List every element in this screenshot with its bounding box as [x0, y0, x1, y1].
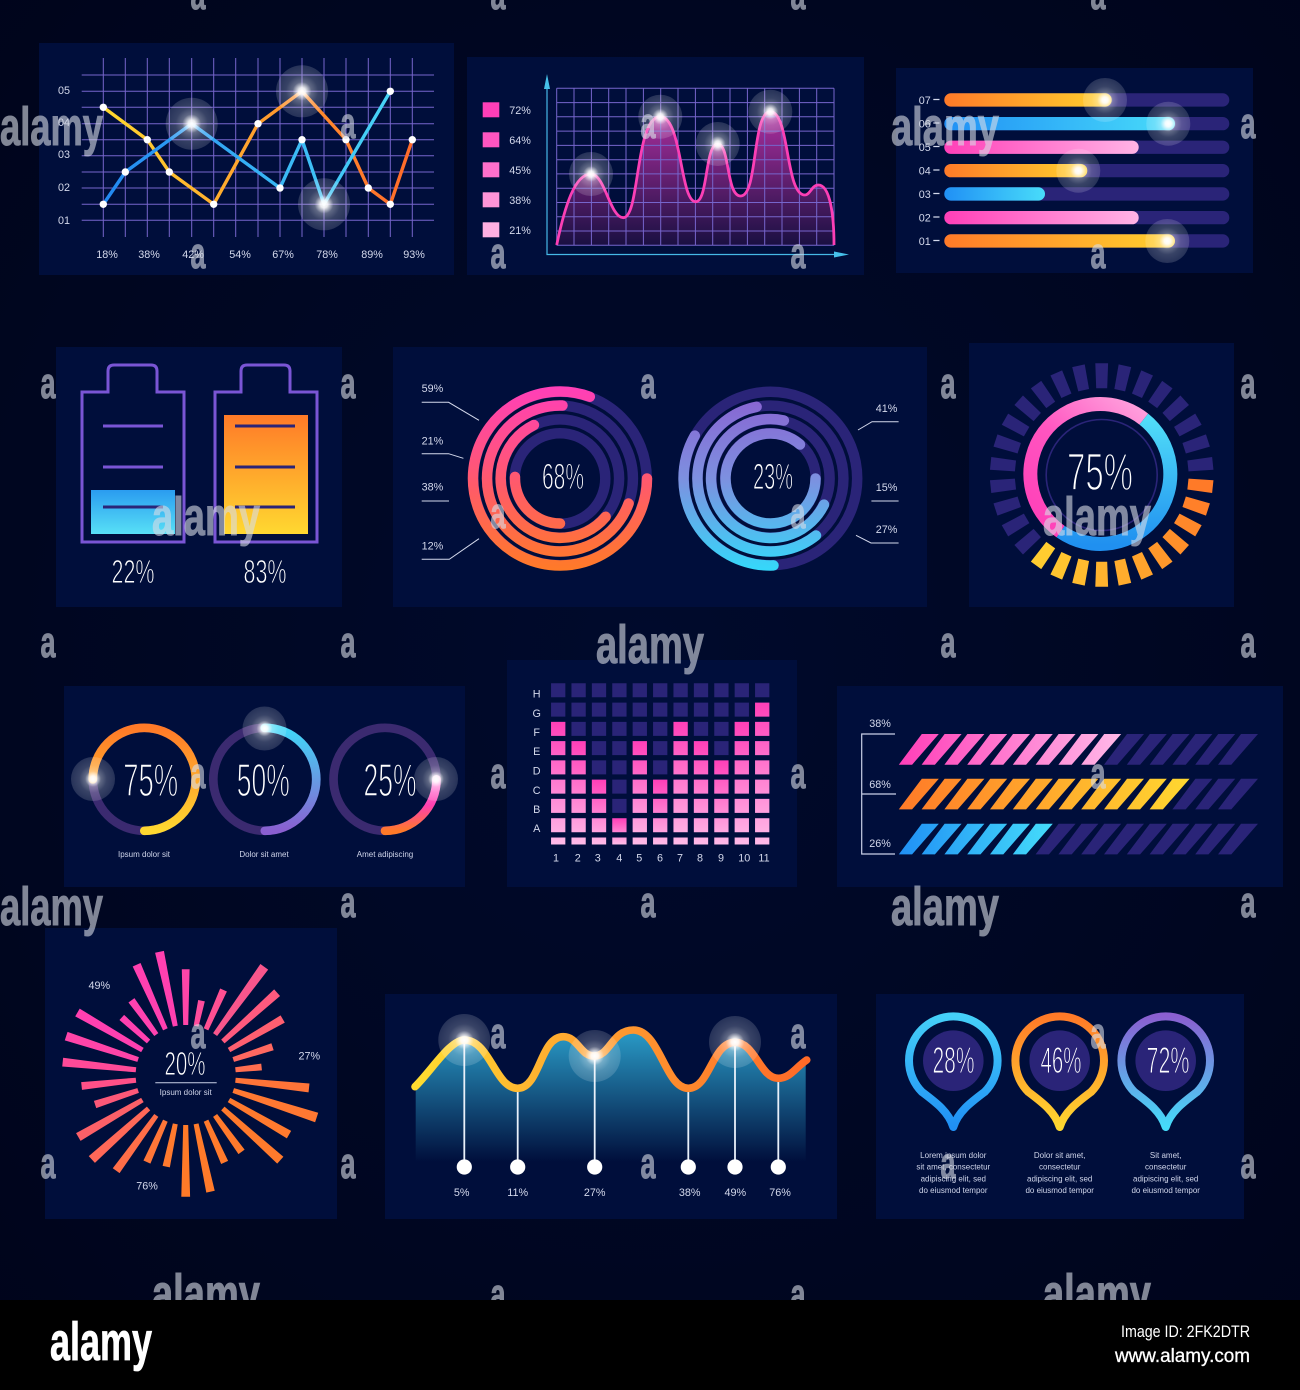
watermark overlay: a — [790, 749, 806, 798]
x axis labels — [96, 249, 425, 261]
legend: 72% — [509, 105, 531, 117]
burst rays — [62, 951, 318, 1197]
row labels: F — [533, 727, 540, 739]
leader labels left: 59% — [422, 383, 444, 395]
burst labels: 49% — [88, 980, 110, 992]
watermark overlay: a — [190, 1009, 206, 1058]
wave labels: 27% — [584, 1187, 606, 1199]
watermark overlay: a — [340, 1139, 356, 1188]
panel: concentric ring gauges — [393, 347, 927, 607]
bar labels: 04 — [919, 166, 931, 178]
footer bar: alamy — [50, 1312, 152, 1372]
footer bar: www.alamy.com — [1114, 1346, 1250, 1367]
pin 28%: 28% — [932, 1040, 974, 1081]
wave labels: 11% — [507, 1187, 529, 1199]
legend — [483, 102, 531, 237]
footer bar — [0, 1300, 1300, 1390]
watermark overlay: a — [940, 618, 956, 667]
stripes 38% pink — [899, 734, 1121, 765]
pin 28%: Lorem ipsum dolor — [920, 1151, 987, 1160]
watermark overlay: alamy — [891, 877, 999, 937]
ring gauge 68%: 68% — [542, 456, 584, 497]
watermark overlay: a — [940, 1139, 956, 1188]
gauge 75% — [71, 728, 196, 859]
axes with arrows — [544, 74, 849, 258]
row labels: E — [533, 746, 540, 758]
glow highlights — [569, 90, 792, 196]
bar labels: 03 — [919, 189, 931, 201]
y axis labels: 02 — [58, 182, 70, 194]
stripes 68% orange — [899, 779, 1190, 809]
watermark overlay: a — [640, 1139, 656, 1188]
gauge 75%: 75% — [123, 754, 178, 806]
x axis labels: 78% — [316, 249, 338, 261]
watermark overlay: alamy — [1043, 487, 1151, 547]
leader labels right: 41% — [876, 403, 898, 415]
panel: two-series line chart — [39, 43, 454, 275]
legend: 38% — [509, 195, 531, 207]
y axis labels — [58, 85, 70, 227]
pin 28%: adipiscing elit, sed — [921, 1174, 986, 1183]
column labels: 9 — [718, 852, 724, 864]
area curve — [557, 112, 834, 245]
watermark overlay: a — [190, 229, 206, 278]
pin 46%: do eiusmod tempor — [1025, 1186, 1094, 1195]
watermark overlay: a — [1240, 878, 1256, 927]
y axis labels: 01 — [58, 215, 70, 227]
column labels — [553, 852, 770, 864]
watermark overlay: a — [340, 878, 356, 927]
leader labels left: 38% — [422, 482, 444, 494]
panel: three circular progress gauges — [64, 686, 465, 887]
watermark overlay: a — [790, 229, 806, 278]
gauge 50%: 50% — [237, 754, 290, 806]
column labels: 4 — [616, 852, 622, 864]
watermark overlay: a — [1240, 359, 1256, 408]
panel: radial tick gauge — [969, 343, 1234, 607]
column labels: 7 — [677, 852, 683, 864]
battery 22%: 22% — [112, 553, 154, 590]
matrix columns — [558, 683, 762, 844]
watermark overlay: a — [40, 359, 56, 408]
row labels: A — [533, 823, 541, 835]
panel: radial burst chart — [45, 928, 337, 1219]
area fill — [557, 112, 834, 245]
pin 72%: Sit amet, — [1150, 1151, 1181, 1160]
watermark overlay: a — [490, 489, 506, 538]
stripe tracks — [1036, 734, 1258, 854]
watermark overlay: alamy — [152, 1264, 260, 1324]
column labels: 3 — [595, 852, 601, 864]
ring gauge 23%: 23% — [753, 456, 793, 497]
watermark overlay: a — [490, 1009, 506, 1058]
watermark overlay: a — [790, 489, 806, 538]
watermark overlay: alamy — [0, 97, 103, 157]
battery 83%: 83% — [244, 553, 286, 590]
column labels: 8 — [697, 852, 703, 864]
gauge 25%: Amet adipiscing — [357, 850, 413, 859]
gauge 25%: 25% — [364, 754, 416, 806]
pin 28%: sit amet, consectetur — [916, 1163, 991, 1172]
burst centre value: 20% — [164, 1045, 206, 1082]
row labels: D — [533, 765, 541, 777]
panel: map pin gauges — [876, 994, 1244, 1219]
watermark overlay: a — [640, 878, 656, 927]
burst labels — [88, 980, 320, 1192]
y axis labels: 05 — [58, 85, 70, 97]
line series: blue — [103, 91, 390, 204]
pin 72%: adipiscing elit, sed — [1133, 1174, 1198, 1183]
bar labels: 01 — [919, 236, 931, 248]
watermark overlay: a — [1240, 1139, 1256, 1188]
gauge 75%: Ipsum dolor sit — [118, 850, 171, 859]
gauge ring — [1030, 404, 1170, 544]
pin 28%: do eiusmod tempor — [919, 1186, 988, 1195]
pin 72%: consectetur — [1145, 1163, 1187, 1172]
wave labels: 38% — [679, 1187, 701, 1199]
gauge 50% — [213, 706, 316, 859]
pin 46%: adipiscing elit, sed — [1027, 1174, 1092, 1183]
bracket and labels: 38% — [869, 718, 891, 730]
bar labels — [919, 95, 940, 248]
watermark overlay: a — [490, 749, 506, 798]
column labels: 6 — [657, 852, 663, 864]
bar labels: 05 — [919, 142, 931, 154]
leader labels left: 21% — [422, 436, 444, 448]
panel: matrix heat map — [507, 660, 797, 887]
watermark overlay: alamy — [596, 615, 704, 675]
watermark overlay: a — [340, 618, 356, 667]
watermark overlay: a — [1240, 99, 1256, 148]
ring gauge 68% — [473, 391, 647, 565]
row labels: G — [532, 708, 541, 720]
watermark overlay: alamy — [1043, 1264, 1151, 1324]
x axis labels: 89% — [361, 249, 383, 261]
panel: striped progress bars — [837, 686, 1283, 887]
line series: yellow to orange — [103, 91, 412, 204]
row labels — [532, 688, 541, 835]
watermark overlay: a — [1090, 749, 1106, 798]
watermark overlay: a — [490, 1270, 506, 1319]
bar labels: 07 — [919, 95, 931, 107]
wave labels: 49% — [724, 1187, 746, 1199]
gauge 25% — [334, 728, 458, 859]
pin 28% — [909, 1016, 998, 1195]
leader labels left — [422, 383, 479, 559]
x axis labels: 93% — [403, 249, 425, 261]
watermark overlay: a — [490, 229, 506, 278]
gauge 50%: Dolor sit amet — [239, 850, 289, 859]
wave labels — [454, 1187, 791, 1199]
column labels: 11 — [758, 852, 770, 864]
leader labels right: 27% — [876, 524, 898, 536]
watermark overlay: a — [340, 359, 356, 408]
bracket and labels — [862, 718, 896, 854]
radial ticks — [990, 363, 1213, 587]
pin 46% — [1015, 1016, 1104, 1195]
legend: 45% — [509, 165, 531, 177]
stripes 26% blue — [899, 824, 1053, 854]
legend: 64% — [509, 135, 531, 147]
leader labels left: 12% — [422, 540, 444, 552]
pin 72% — [1121, 1016, 1210, 1195]
bracket and labels: 26% — [869, 838, 891, 850]
leader labels right — [856, 403, 899, 543]
watermark overlay: a — [790, 1009, 806, 1058]
burst centre value — [155, 1045, 217, 1097]
x axis labels: 54% — [229, 249, 251, 261]
y axis labels: 04 — [58, 117, 70, 129]
row labels: C — [533, 785, 541, 797]
pin 46%: 46% — [1040, 1040, 1082, 1081]
watermark overlay: a — [40, 618, 56, 667]
watermark overlay: a — [940, 359, 956, 408]
pin 72%: 72% — [1146, 1040, 1190, 1081]
data markers — [100, 88, 416, 208]
watermark overlay: a — [1090, 229, 1106, 278]
watermark overlay: a — [790, 1270, 806, 1319]
column labels: 10 — [738, 852, 750, 864]
battery 22% — [82, 365, 184, 590]
pin 72%: do eiusmod tempor — [1131, 1186, 1200, 1195]
watermark overlay: alamy — [891, 97, 999, 157]
watermark overlay: a — [340, 99, 356, 148]
panel: horizontal progress bars — [896, 68, 1253, 273]
footer bar: Image ID: 2FK2DTR — [1121, 1322, 1250, 1341]
panel: pink area chart — [467, 57, 864, 275]
row labels: H — [533, 688, 541, 700]
x axis labels: 18% — [96, 249, 118, 261]
watermark overlay: a — [40, 1139, 56, 1188]
pin 46%: Dolor sit amet, — [1034, 1151, 1085, 1160]
watermark overlay: a — [640, 359, 656, 408]
row labels: B — [533, 804, 540, 816]
x axis labels: 38% — [138, 249, 160, 261]
column labels: 2 — [575, 852, 581, 864]
pin stems and dots — [457, 1040, 786, 1175]
watermark overlay: a — [640, 99, 656, 148]
watermark overlay: a — [190, 749, 206, 798]
bar labels: 06 — [919, 118, 931, 130]
gauge value: 75% — [1067, 443, 1133, 502]
glow highlights — [438, 1014, 761, 1082]
panel: wave chart with pins — [385, 994, 837, 1219]
watermark overlay: alamy — [0, 877, 103, 937]
x axis labels: 42% — [182, 249, 204, 261]
bar labels: 02 — [919, 212, 931, 224]
wave line — [415, 1030, 807, 1088]
watermark overlay: alamy — [152, 487, 260, 547]
burst centre value: Ipsum dolor sit — [160, 1088, 212, 1097]
bracket and labels: 68% — [869, 779, 891, 791]
watermark overlay: a — [1090, 1009, 1106, 1058]
burst labels: 27% — [298, 1050, 320, 1062]
leader labels right: 15% — [876, 482, 898, 494]
wave labels: 76% — [769, 1187, 791, 1199]
column labels: 5 — [636, 852, 642, 864]
panel: batteries — [56, 347, 342, 607]
column labels: 1 — [553, 852, 559, 864]
wave labels: 5% — [454, 1187, 470, 1199]
bar tracks — [944, 93, 1229, 248]
glow highlights — [166, 65, 350, 230]
watermark overlay: a — [1240, 618, 1256, 667]
glow highlights — [1056, 78, 1190, 263]
battery 83% — [215, 365, 317, 590]
legend: 21% — [509, 225, 531, 237]
burst labels: 76% — [136, 1180, 158, 1192]
wave area — [416, 1030, 806, 1162]
pin 46%: consectetur — [1039, 1163, 1081, 1172]
y axis labels: 03 — [58, 149, 70, 161]
x axis labels: 67% — [272, 249, 294, 261]
ring gauge 23% — [684, 392, 857, 565]
bar fills — [944, 93, 1175, 248]
